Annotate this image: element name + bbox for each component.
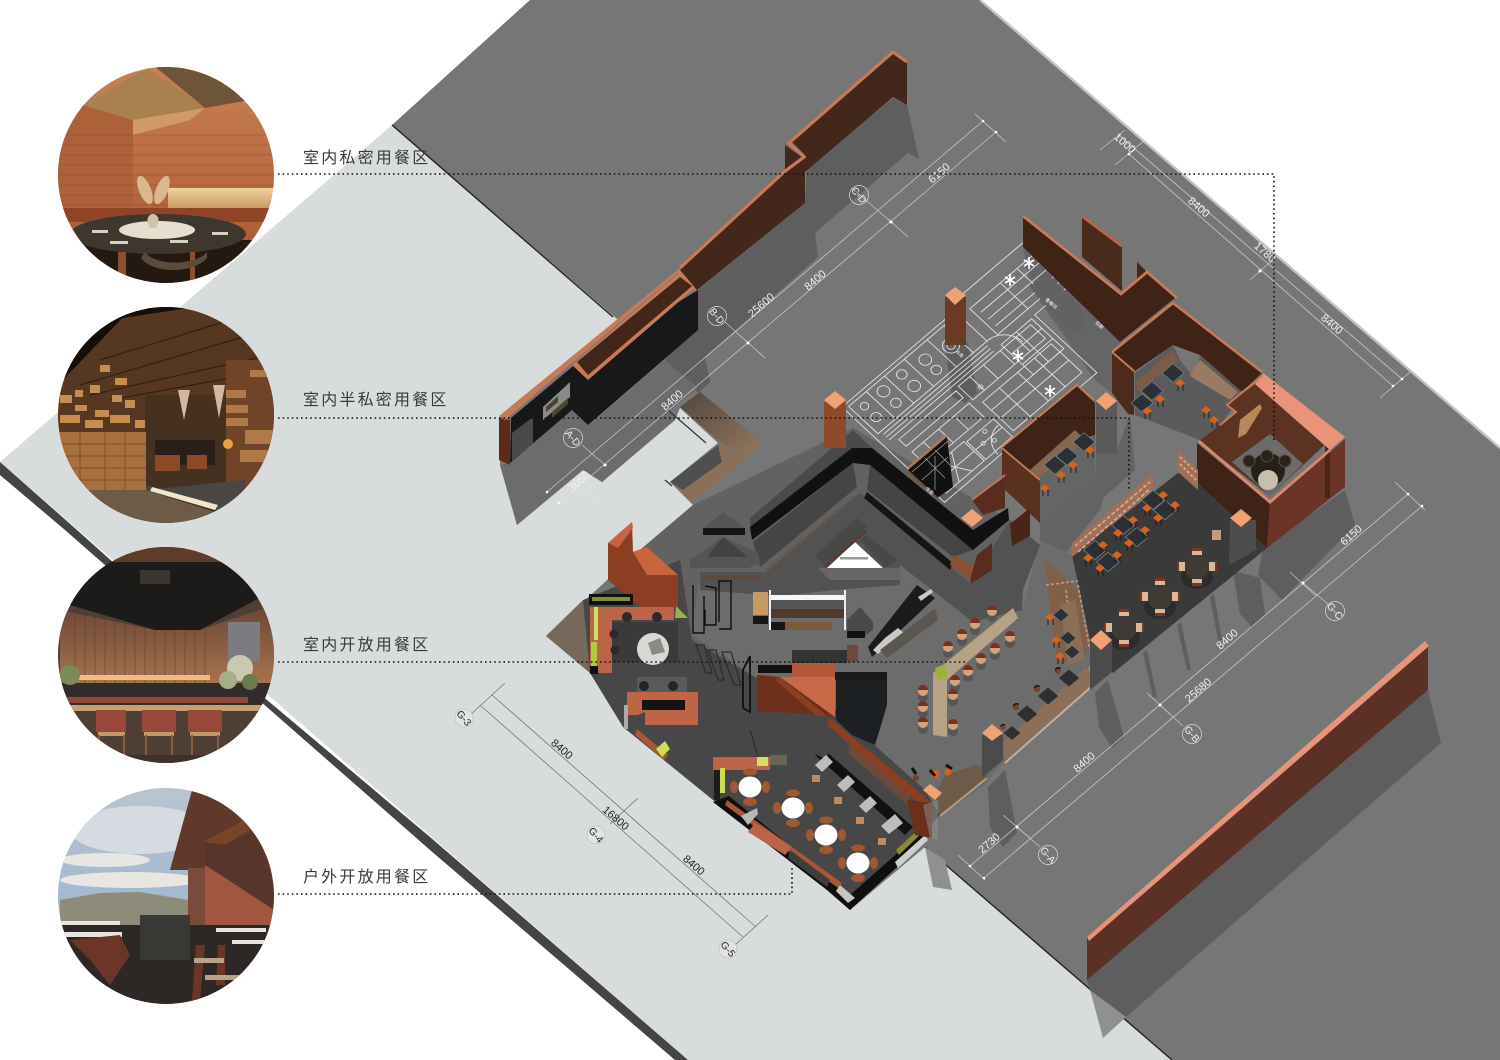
dimension labels: dark: 8400 xyxy=(548,737,575,762)
dimension labels: white: 8400 xyxy=(802,268,829,293)
dimension labels: white xyxy=(566,131,1365,856)
label: open: 室内开放用餐区 xyxy=(303,636,430,654)
structural columns xyxy=(824,287,1256,840)
dimension labels: white: 2730 xyxy=(976,831,1003,856)
lower boundary wall xyxy=(1087,641,1429,980)
kitchen dark service zone xyxy=(908,272,1085,498)
terrace stools xyxy=(812,775,886,845)
label: outdoor: 户外开放用餐区 xyxy=(303,868,430,886)
dimension nodes xyxy=(546,120,1423,879)
dimension labels: white: 8400 xyxy=(1318,312,1345,337)
kitchen icons: stars xyxy=(1005,257,1055,397)
dimension labels: white: 25680 xyxy=(1183,676,1214,705)
grid bubbles: white: G-B xyxy=(1181,724,1201,745)
brick screens xyxy=(1045,450,1198,665)
kitchen room labels: 后厨 xyxy=(1094,319,1105,331)
grid bubbles: dark: G-5 xyxy=(718,940,737,960)
dimension labels: white: 8400 xyxy=(1214,627,1241,652)
cast shadows xyxy=(665,98,1441,1017)
dotted leader lines xyxy=(278,174,1274,894)
grid bubbles: white: B-D xyxy=(706,307,726,327)
booth room 1 xyxy=(1131,345,1242,440)
dimension labels: white: 1780 xyxy=(1251,240,1278,265)
stair screens xyxy=(693,581,750,712)
private dining room xyxy=(1197,373,1345,548)
skylight void xyxy=(815,518,900,580)
interior floor xyxy=(546,428,1267,910)
dimension labels: white: 8400 xyxy=(659,388,686,413)
booth room 2 xyxy=(1002,385,1095,525)
grid bubbles: dark: G-4 xyxy=(586,826,605,846)
dimension labels: white: 25600 xyxy=(746,291,777,320)
shadow on paving xyxy=(925,847,1126,1038)
dimension labels: white: 3050 xyxy=(566,469,593,494)
grid bubbles: white: C-D xyxy=(848,185,868,206)
site plate: dark ground xyxy=(392,0,1500,1060)
bar counter with stools xyxy=(918,605,1018,737)
dimension labels: dark xyxy=(548,737,707,878)
dimension labels: dark: 8400 xyxy=(680,853,707,878)
kitchen room labels: 传菜 xyxy=(924,485,935,497)
round tables xyxy=(1104,530,1221,650)
back wall band xyxy=(1023,216,1262,415)
stair treads xyxy=(696,645,762,770)
photo: semi-private dining xyxy=(58,300,274,530)
dimension labels: dark: 16800 xyxy=(600,804,631,833)
grid bubbles: white: A-D xyxy=(562,429,582,449)
grid bubbles: white: G-C xyxy=(1324,601,1344,622)
communal tables xyxy=(1083,490,1180,576)
sunken entrance pit xyxy=(665,392,763,502)
outdoor terrace xyxy=(713,755,928,910)
upper boundary wall xyxy=(680,52,907,290)
terrace sofas xyxy=(815,755,903,834)
kitchen room labels: 备餐间 xyxy=(1044,296,1059,311)
photo: open dining xyxy=(58,547,274,767)
lounge seating: upper left xyxy=(589,522,688,674)
kitchen room labels xyxy=(924,296,1105,497)
photo: outdoor dining xyxy=(58,788,274,1005)
bar service counters xyxy=(690,512,938,663)
dimension labels: white: 1000 xyxy=(1111,131,1138,156)
dimension labels: white: 6150 xyxy=(926,161,953,186)
dimension labels: white: 6150 xyxy=(1338,523,1365,548)
dimension labels: white: 8400 xyxy=(1185,195,1212,220)
central zigzag bar canopy xyxy=(750,430,1030,583)
photo: private dining xyxy=(58,60,274,285)
label: private: 室内私密用餐区 xyxy=(303,149,430,167)
feature wall and dark void xyxy=(757,663,932,838)
dimension lines xyxy=(547,114,1425,880)
site plate: light paving xyxy=(0,125,1172,1060)
dimension labels: white: 8400 xyxy=(1071,750,1098,775)
kitchen room labels: 冷库 xyxy=(954,348,965,360)
lower-left dimension lines xyxy=(470,683,768,945)
grid bubbles: white xyxy=(562,185,1344,866)
wall booth tables xyxy=(912,600,1100,816)
grid bubbles: white: G-A xyxy=(1037,845,1057,866)
lounge seating: U-shaped xyxy=(624,677,698,760)
grid bubbles: dark xyxy=(454,709,737,960)
grid bubbles: dark: G-3 xyxy=(454,709,473,729)
entrance wall: A-D side xyxy=(499,268,698,525)
label: semi-private: 室内半私密用餐区 xyxy=(303,391,449,409)
kitchen plan linework xyxy=(836,236,1139,502)
